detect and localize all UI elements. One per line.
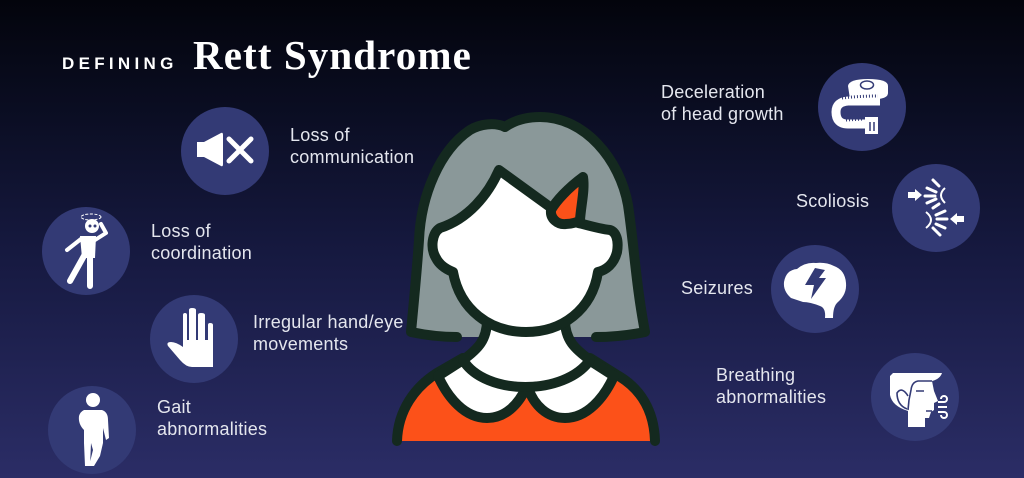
hair clip [551,177,584,224]
title: Rett Syndrome: Rett Syndrome [193,32,472,78]
icon: raised hand [150,295,238,383]
label: loss of coordination [151,221,252,262]
label: loss of coordination: Loss of [151,221,211,241]
icon: scoliosis spine [892,164,980,252]
label: irregular hand/eye movements [253,312,404,354]
sweater [397,373,655,441]
label: breathing abnormalities [716,365,826,406]
face [433,170,618,332]
icon: face breathing [871,353,959,441]
neck [463,320,590,387]
label: irregular hand/eye movements: Irregular hand/eye [253,312,404,332]
label: loss of communication: Loss of [290,125,350,145]
illustration: girl [397,117,655,441]
label: irregular hand/eye movements: movements [253,334,348,354]
label: breathing abnormalities: abnormalities [716,386,826,406]
heading: defining: DEFINING [62,54,178,73]
icon: muted speaker [181,107,269,195]
icon: walking person [48,386,136,474]
label: loss of communication [290,125,414,166]
collar left [438,360,526,418]
label: scoliosis: Scoliosis [796,191,869,211]
hair [411,117,645,337]
icon: brain with lightning [771,245,859,333]
label: breathing abnormalities: Breathing [716,365,795,385]
label: loss of communication: communication [290,146,414,166]
collar right [528,360,614,418]
icon: dizzy person [42,207,130,295]
label: deceleration of head growth: of head growth [661,104,784,124]
label: deceleration of head growth: Deceleration [661,82,765,102]
label: loss of coordination: coordination [151,242,252,262]
label: gait abnormalities: abnormalities [157,418,267,438]
label: gait abnormalities: Gait [157,397,191,417]
label: seizures: Seizures [681,278,753,298]
label: deceleration of head growth [661,82,784,124]
label: gait abnormalities [157,397,267,438]
icon: measuring tape [818,63,906,151]
